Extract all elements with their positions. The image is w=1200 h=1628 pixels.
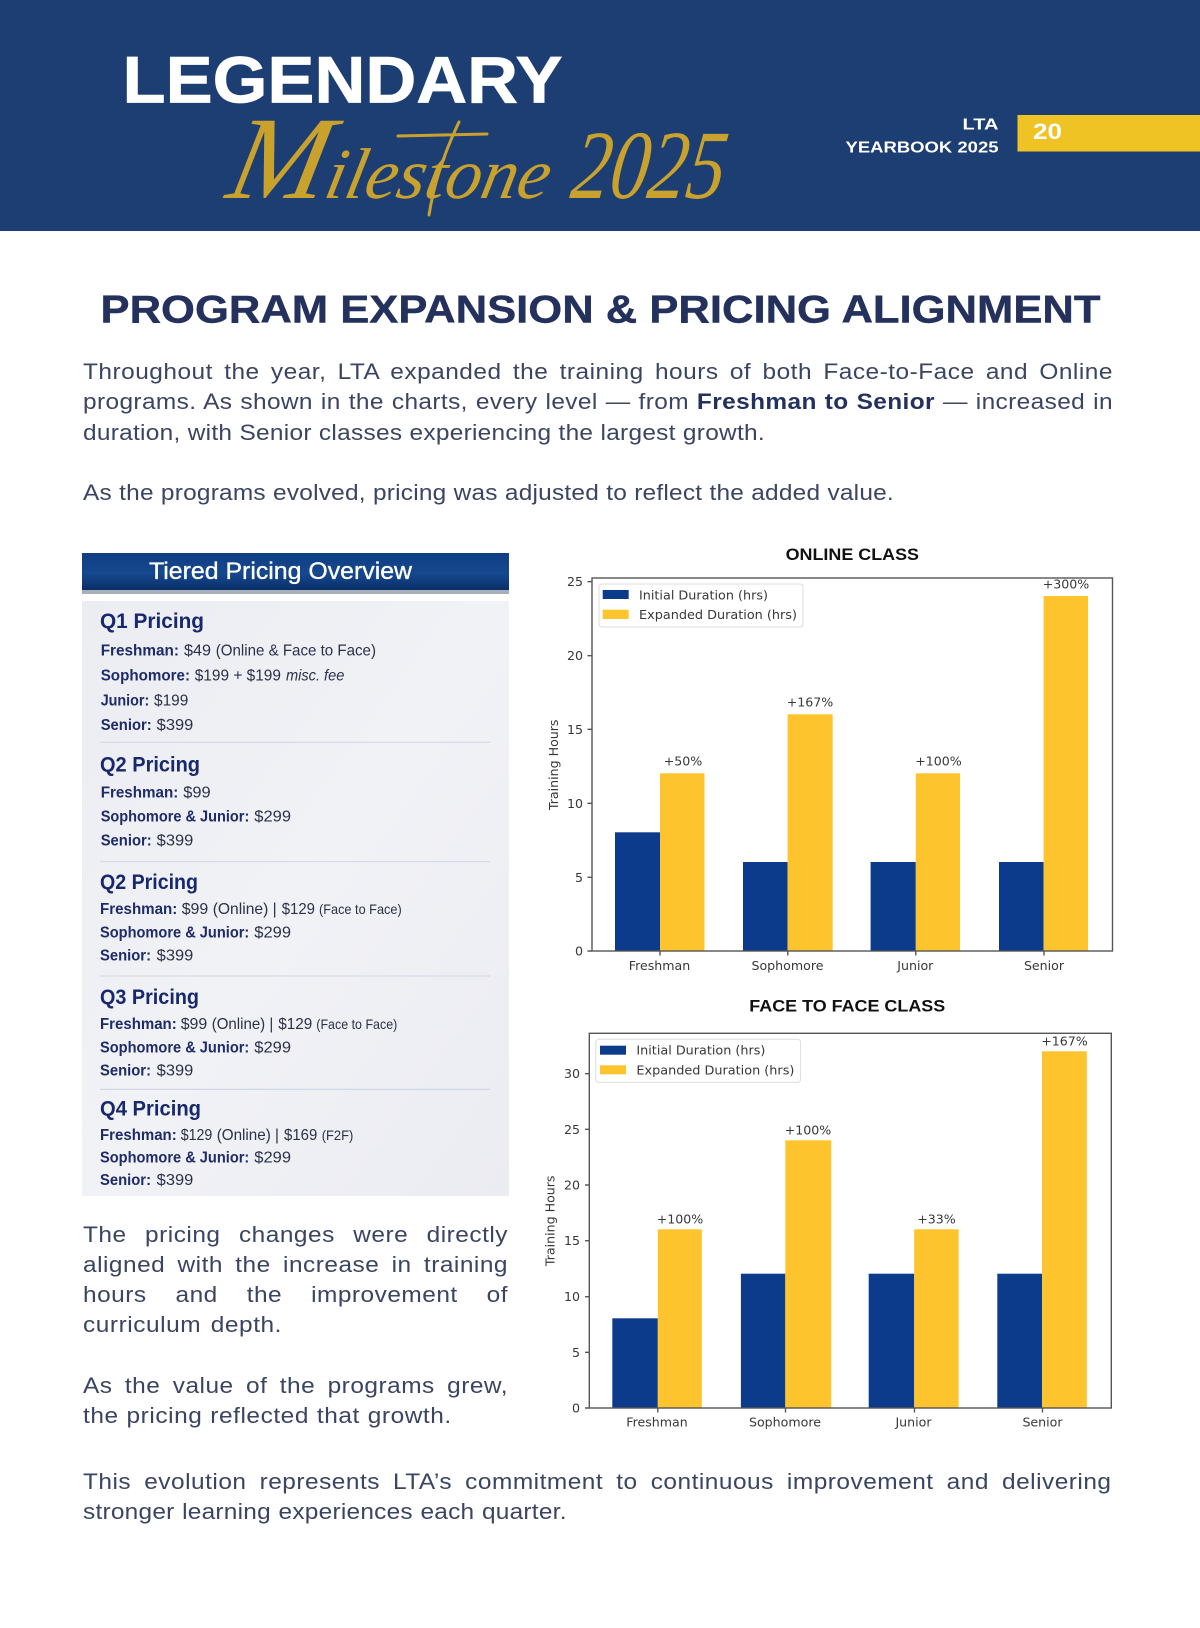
y axis tick labels: 25 [564,1122,580,1137]
Q1 pricing [100,610,376,734]
chart: face to face class [542,998,1112,1430]
y axis tick labels: 30 [564,1066,580,1081]
chart legend: Initial Duration (hrs) [636,1043,765,1058]
y axis tick labels: 0 [575,944,583,958]
y axis tick labels: 5 [575,870,583,885]
pricing commentary text: the pricing reflected that growth. [83,1403,452,1428]
expanded duration bars [660,596,1088,951]
chart title: face to face class: FACE TO FACE CLASS [749,998,945,1016]
chart legend [599,584,803,627]
Q4 pricing: Q4 Pricing [100,1098,201,1121]
x axis category labels [629,958,1065,973]
pricing commentary text: curriculum depth. [83,1312,282,1337]
chart title: online class: ONLINE CLASS [786,546,919,564]
Q2 pricing: $99 [183,785,211,802]
pricing commentary text: aligned with the increase in training [83,1252,508,1277]
initial duration bars [612,1274,1042,1408]
percentage increase labels: +100% [915,753,962,768]
Q1 pricing: misc. fee [286,668,344,685]
percentage increase labels: +300% [1043,576,1089,591]
percentage increase labels: +33% [917,1212,956,1227]
Q2 pricing, online and face to face: Sophomore & Junior: [100,924,249,941]
percentage increase labels: +167% [1041,1034,1088,1049]
Q1 pricing: $399 [157,717,193,734]
Q2 pricing: Senior: [101,832,152,849]
pricing commentary text: The pricing changes were directly [83,1222,508,1247]
Q4 pricing: (Online) | [217,1127,279,1144]
percentage increase labels: +50% [664,753,702,768]
Q4 pricing: Sophomore & Junior: [100,1150,249,1167]
y axis tick labels [564,1066,580,1416]
y axis tick labels: 5 [572,1345,580,1360]
Q3 pricing: Q3 Pricing [100,986,199,1009]
chart: online class [546,546,1114,973]
chart legend: Expanded Duration (hrs) [636,1062,794,1077]
Q2 pricing, online and face to face: $129 [282,901,315,918]
y axis tick labels: 25 [567,574,583,589]
x axis category labels: Junior [896,958,934,973]
Q2 pricing, online and face to face [100,871,402,965]
x axis category labels: Junior [894,1415,932,1430]
percentage increase labels: +100% [657,1212,703,1227]
yearbook label: LTA [962,116,999,134]
Q2 pricing, online and face to face: (Face to Face) [319,901,402,917]
title: LEGENDARY: LEGENDARY [122,42,562,116]
Q2 pricing, online and face to face: $299 [254,924,291,941]
y axis tick labels: 0 [572,1400,580,1416]
Q4 pricing [100,1098,353,1189]
pricing panel title bar: Tiered Pricing Overview [149,558,412,585]
Q1 pricing: (Online & Face to Face) [216,643,376,660]
Q1 pricing: $199 [154,693,188,710]
Q2 pricing: Freshman: [101,785,178,802]
percentage increase labels [664,576,1089,768]
intro text block: Throughout the year, LTA expanded the training hours of both Face-to-Face and Online [83,359,1113,384]
Q2 pricing: $399 [157,832,193,849]
x axis category labels [626,1415,1063,1430]
y axis tick labels: 20 [567,648,583,663]
Q4 pricing: $169 [284,1127,317,1144]
intro text block: duration, with Senior classes experiencing the largest growth. [83,420,765,445]
Q3 pricing: Senior: [100,1063,151,1080]
Q4 pricing: (F2F) [322,1127,353,1143]
Q2 pricing: Sophomore & Junior: [101,809,249,826]
Q1 pricing: Freshman: [101,643,179,660]
percentage increase labels: +100% [785,1123,831,1138]
Q1 pricing: $199 + $199 [195,668,281,685]
page number tab [1018,115,1200,152]
Q2 pricing, online and face to face: $99 [182,901,208,918]
closing text block: This evolution represents LTA’s commitment to continuous improvement and delivering [83,1469,1112,1494]
yearbook label [846,116,999,156]
closing text block: stronger learning experiences each quarter. [83,1499,567,1524]
pricing commentary text: hours and the improvement of [83,1282,508,1307]
Q3 pricing: Freshman: [100,1016,177,1033]
pricing commentary text: As the value of the programs grew, [83,1373,508,1398]
Q3 pricing: $99 [181,1016,207,1033]
Q2 pricing: $299 [254,809,291,826]
initial duration bars [615,832,1044,951]
Q4 pricing: $299 [254,1150,291,1167]
closing text block [83,1469,1112,1524]
Q2 pricing, online and face to face: $399 [157,948,193,965]
y axis tick labels: 10 [564,1289,580,1304]
y axis tick labels: 20 [564,1178,580,1192]
x axis category labels: Sophomore [751,958,824,973]
Q1 pricing: Junior: [101,693,149,710]
axes frame and ticks [585,1033,1111,1412]
x axis category labels: Freshman [626,1415,688,1430]
page number tab: 20 [1033,119,1062,144]
Q3 pricing: Sophomore & Junior: [100,1040,249,1057]
Q4 pricing: $399 [157,1172,193,1189]
chart legend [596,1039,801,1082]
Q3 pricing: $299 [254,1040,291,1057]
y axis tick labels: 15 [564,1233,580,1248]
x axis category labels: Freshman [629,958,690,973]
Q3 pricing: (Online) | [212,1016,273,1033]
Q2 pricing: Q2 Pricing [100,754,200,777]
Q1 pricing: Senior: [101,717,152,734]
y axis tick labels: 10 [567,796,583,811]
intro text block: As the programs evolved, pricing was adjusted to reflect the added value. [83,480,894,505]
chart legend: Initial Duration (hrs) [639,588,768,603]
pricing commentary text [83,1222,508,1428]
Q1 pricing: $49 [184,643,211,660]
y axis tick labels [567,574,583,958]
Q3 pricing: $129 [278,1016,312,1033]
x axis category labels: Senior [1024,958,1065,973]
script subtitle: Milestone 2025 [217,93,734,224]
Q4 pricing: Freshman: [100,1127,177,1144]
intro text block: programs. As shown in the charts, every level — from Freshman to Senior — increased in [83,389,1113,414]
Q2 pricing, online and face to face: Senior: [100,948,151,965]
Q4 pricing: $129 [181,1127,212,1144]
page heading: PROGRAM EXPANSION & PRICING ALIGNMENT [100,288,1101,332]
pricing panel title bar [82,553,509,594]
percentage increase labels: +167% [787,695,833,710]
y axis tick labels: 15 [567,722,583,737]
Q2 pricing, online and face to face: (Online) | [213,901,277,918]
expanded duration bars [658,1051,1087,1408]
header banner [0,0,1200,231]
Q2 pricing, online and face to face: Freshman: [100,901,177,918]
Q3 pricing: (Face to Face) [316,1016,397,1032]
Q1 pricing: Q1 Pricing [100,610,204,633]
x axis category labels: Senior [1022,1415,1063,1430]
Q2 pricing, online and face to face: Q2 Pricing [100,871,198,894]
Q3 pricing [100,986,397,1080]
percentage increase labels [657,1034,1088,1227]
pricing overview panel [82,553,509,1196]
Q4 pricing: Senior: [100,1172,151,1189]
axes frame and ticks [588,578,1112,956]
intro text block [83,359,1113,505]
yearbook label: YEARBOOK 2025 [846,140,999,156]
y axis title: Training Hours [542,1176,558,1267]
Q3 pricing: $399 [157,1063,193,1080]
x axis category labels: Sophomore [749,1415,821,1430]
Q1 pricing: Sophomore: [101,668,190,685]
script subtitle: Milestone 2025: Milestone [217,93,568,224]
Q2 pricing [100,754,291,849]
script subtitle: Milestone 2025: 2025 [566,111,734,220]
chart legend: Expanded Duration (hrs) [639,607,797,622]
y axis title: Training Hours [546,720,561,811]
